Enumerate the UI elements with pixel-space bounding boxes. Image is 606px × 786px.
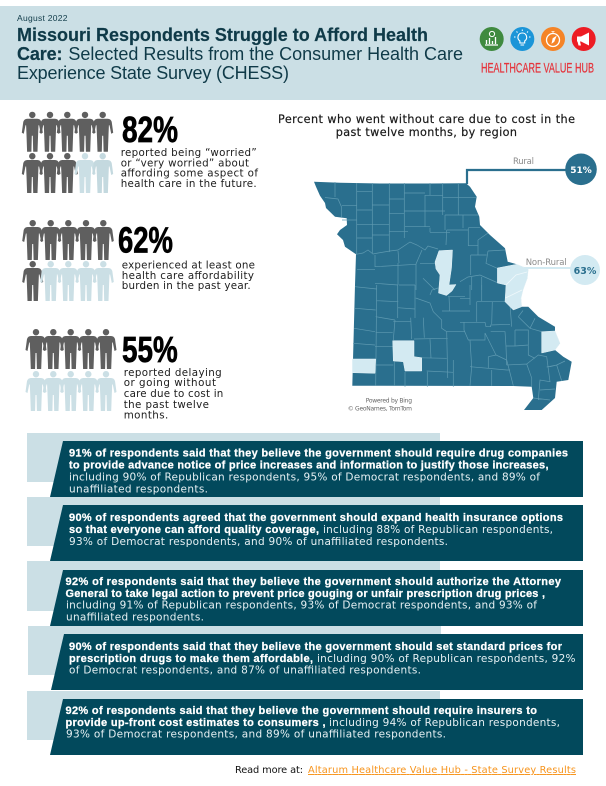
panel: cost estimates: provide up-front cost estimates to consumers , [66,717,326,729]
callout: rural 51%: Rural [513,157,534,167]
stat: 55% [26,329,223,422]
icon: light bulb [510,27,534,51]
stat: 82%: reported being “worried” [121,147,257,159]
county lines [325,182,505,275]
panel: expand insurance: 90% of respondents agreed that the government should expand health insurance options [69,512,563,524]
stat: 55%: or going without [124,377,216,389]
panel: attorney general action [27,561,583,626]
map: Missouri counties by rural and non-rural [314,182,572,413]
title: Selected Results from the Consumer Health Care [68,44,463,64]
stat: 55%: 55% [122,329,178,370]
stat: 62%: experienced at least one [122,260,255,272]
chart title: past twelve months, by region [336,126,517,139]
stat: 82%: affording some aspect of [121,168,258,180]
callout: rural 51% [467,154,597,185]
icon: chart [480,27,504,51]
panel: cost estimates: 93% of Democrat respondents, and 89% of unaffiliated respondents. [66,729,446,741]
panel: cost estimates: including 94% of Republican respondents, [329,717,560,729]
panel: attorney general action: including 91% of Republican respondents, 93% of Democrat respondents, and 93% of [66,600,537,612]
logo: Healthcare Value Hub [480,27,596,76]
callout: non-rural 63%: Non-Rural [526,258,567,268]
title: Care: [17,44,62,64]
stat: 62%: health care affordability [122,270,254,282]
panel: drug price notice [27,433,583,497]
panel: drug price notice: 91% of respondents said that they believe the government should require drug companies [69,448,568,460]
panel: drug price notice: including 90% of Republican respondents, 95% of Democrat respondents, and 89% of [69,472,540,484]
title: Experience State Survey (CHESS) [17,63,289,83]
stat: 62%: burden in the past year. [122,280,251,292]
non-rural counties [352,250,560,373]
title: Missouri Respondents Struggle to Afford Health [17,25,428,45]
title [17,25,463,83]
stat: 82% [22,109,258,193]
stat: 55%: care due to cost in [124,388,223,400]
panel: expand insurance: so that everyone can afford quality coverage, [69,524,319,536]
callout: non-rural 63% [524,255,600,285]
person icons: 8 of 10 dark [22,112,113,193]
stat: 62% [22,219,255,301]
panel: standard prices: of Democrat respondents, and 87% of unaffiliated respondents. [69,665,421,677]
map attribution [348,397,412,413]
callout: non-rural 63%: 63% [574,266,597,277]
panel: attorney general action: 92% of respondents said that they believe the government should authorize the Attorney [66,576,562,588]
chart title: Percent who went without care due to cost in the [278,113,575,126]
panel: drug price notice: unaffiliated respondents. [69,483,208,495]
header band [0,6,606,100]
map attribution: © GeoNames, TomTom [348,406,412,413]
icon: compass [541,27,565,51]
panel: standard prices [28,626,583,690]
stat: 55%: reported delaying [124,367,222,379]
panel: expand insurance: including 88% of Republican respondents, [323,524,553,536]
panel: drug price notice: to provide advance notice of price increases and information to justify those increases, [69,460,548,472]
chart title [278,113,575,139]
state outline [314,182,572,410]
icon: megaphone [572,27,596,51]
callout: rural 51%: 51% [570,166,592,176]
panel: standard prices: prescription drugs to make them affordable, [69,653,313,665]
stat: 82%: or “very worried” about [121,157,249,169]
footer: read more link: Read more at: [235,765,303,776]
panel: attorney general action: unaffiliated respondents. [66,612,204,624]
stat: 82%: health care in the future. [121,178,257,190]
stat: 55%: months. [124,410,168,422]
stat: 82%: 82% [122,109,178,150]
stat: 62%: 62% [118,219,173,260]
panel: cost estimates: 92% of respondents said that they believe the government should require insurers to [66,705,537,717]
panel: cost estimates [27,691,583,755]
date: August 2022 [17,13,68,23]
panel: standard prices: including 90% of Republican respondents, 92% [317,653,576,665]
footer: read more link: Altarum Healthcare Value Hub - State Survey Results [308,765,576,776]
panel: expand insurance: 93% of Democrat respondents, and 90% of unaffiliated respondents. [69,536,448,548]
panel: standard prices: 90% of respondents said that they believe the government should set standard prices for [69,641,563,653]
person icons: 6 of 10 dark [22,220,114,301]
person icons: 5 of 10 dark [26,329,116,411]
panel: expand insurance [27,497,583,561]
map attribution: Powered by Bing [366,397,412,404]
stat: 55%: the past twelve [124,399,209,411]
panel: attorney general action: General to take legal action to prevent price gouging or unfair prescription drug prices , [66,588,545,600]
